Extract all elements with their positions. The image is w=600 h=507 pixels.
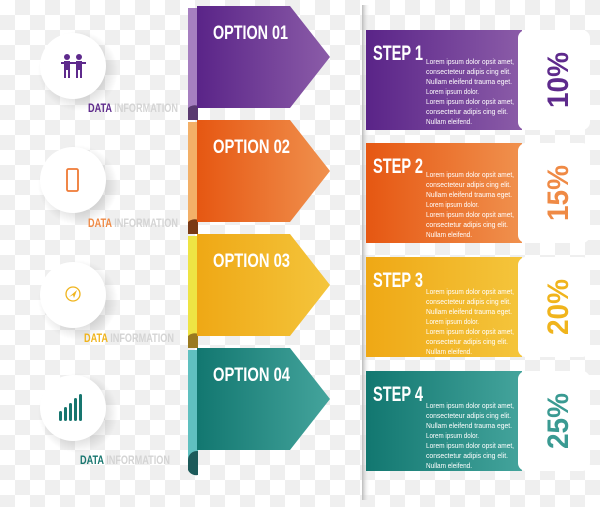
step 1: consecteteur adipis cing elit. — [426, 69, 511, 76]
step 4 — [366, 371, 590, 471]
label: data information 4: DATA INFORMATION — [80, 453, 170, 467]
step 4: Lorem ipsum dolor opsit amet, — [426, 403, 514, 410]
step 2: consectetur adipis cing elit. — [426, 222, 508, 229]
circle: chart icon — [38, 373, 118, 453]
step 4: consectetur adipis cing elit. — [426, 453, 508, 460]
label: data information 2: DATA INFORMATION — [88, 216, 178, 230]
step 3: Lorem ipsum dolor opsit amet, — [426, 329, 514, 336]
step 3: Nullam eleifend trauma eget. — [426, 309, 512, 316]
step 3: Nullam eleifend. — [426, 349, 472, 356]
flag: option 03 — [188, 234, 330, 348]
step 2: Lorem ipsum dolor. — [426, 202, 479, 209]
label: data information 1: DATA INFORMATION — [88, 101, 178, 115]
step 2: Nullam eleifend trauma eget. — [426, 192, 512, 199]
step 2: Lorem ipsum dolor opsit amet, — [426, 172, 514, 179]
flag: option 01: OPTION 01 — [213, 23, 288, 44]
flag: option 01 — [188, 6, 330, 120]
step 3 — [366, 257, 590, 357]
step 1 — [366, 30, 590, 130]
step 4: consecteteur adipis cing elit. — [426, 413, 511, 420]
icon: people — [61, 54, 86, 78]
step 3: Lorem ipsum dolor opsit amet, — [426, 289, 514, 296]
step 1: Nullam eleifend. — [426, 119, 472, 126]
flag: option 03: OPTION 03 — [213, 251, 290, 272]
step 4: Lorem ipsum dolor. — [426, 433, 479, 440]
step 1: 10% — [542, 52, 575, 108]
step 2: consecteteur adipis cing elit. — [426, 182, 511, 189]
icon: bars — [59, 394, 82, 421]
step 3: Lorem ipsum dolor. — [426, 319, 479, 326]
icon: compass — [66, 287, 80, 301]
step 1: STEP 1 — [373, 42, 423, 65]
flag: option 02: OPTION 02 — [213, 137, 290, 158]
step 3: consectetur adipis cing elit. — [426, 339, 508, 346]
step 2: 15% — [542, 165, 575, 221]
step 2: Nullam eleifend. — [426, 232, 472, 239]
circle: people icon — [38, 31, 118, 111]
step 1: Nullam eleifend trauma eget. — [426, 79, 512, 86]
step 1: Lorem ipsum dolor opsit amet, — [426, 59, 514, 66]
flag: option 02 — [188, 120, 330, 234]
step 3: STEP 3 — [373, 269, 423, 292]
flag: option 04: OPTION 04 — [213, 365, 290, 386]
circle: phone icon — [38, 145, 118, 225]
step 2 — [366, 143, 590, 243]
step 4: 25% — [542, 393, 575, 449]
circle: compass icon — [38, 260, 118, 340]
label: data information 3: DATA INFORMATION — [84, 331, 174, 345]
step 2: Lorem ipsum dolor opsit amet, — [426, 212, 514, 219]
step 4: STEP 4 — [373, 383, 423, 406]
step 4: Lorem ipsum dolor opsit amet, — [426, 443, 514, 450]
step 3: 20% — [542, 279, 575, 335]
flag: option 04 — [188, 348, 330, 475]
step 2: STEP 2 — [373, 155, 423, 178]
step 1: Lorem ipsum dolor opsit amet, — [426, 99, 514, 106]
step 1: consectetur adipis cing elit. — [426, 109, 508, 116]
icon: phone — [67, 169, 78, 191]
step 3: consecteteur adipis cing elit. — [426, 299, 511, 306]
step 4: Nullam eleifend trauma eget. — [426, 423, 512, 430]
step 4: Nullam eleifend. — [426, 463, 472, 470]
step 1: Lorem ipsum dolor. — [426, 89, 479, 96]
